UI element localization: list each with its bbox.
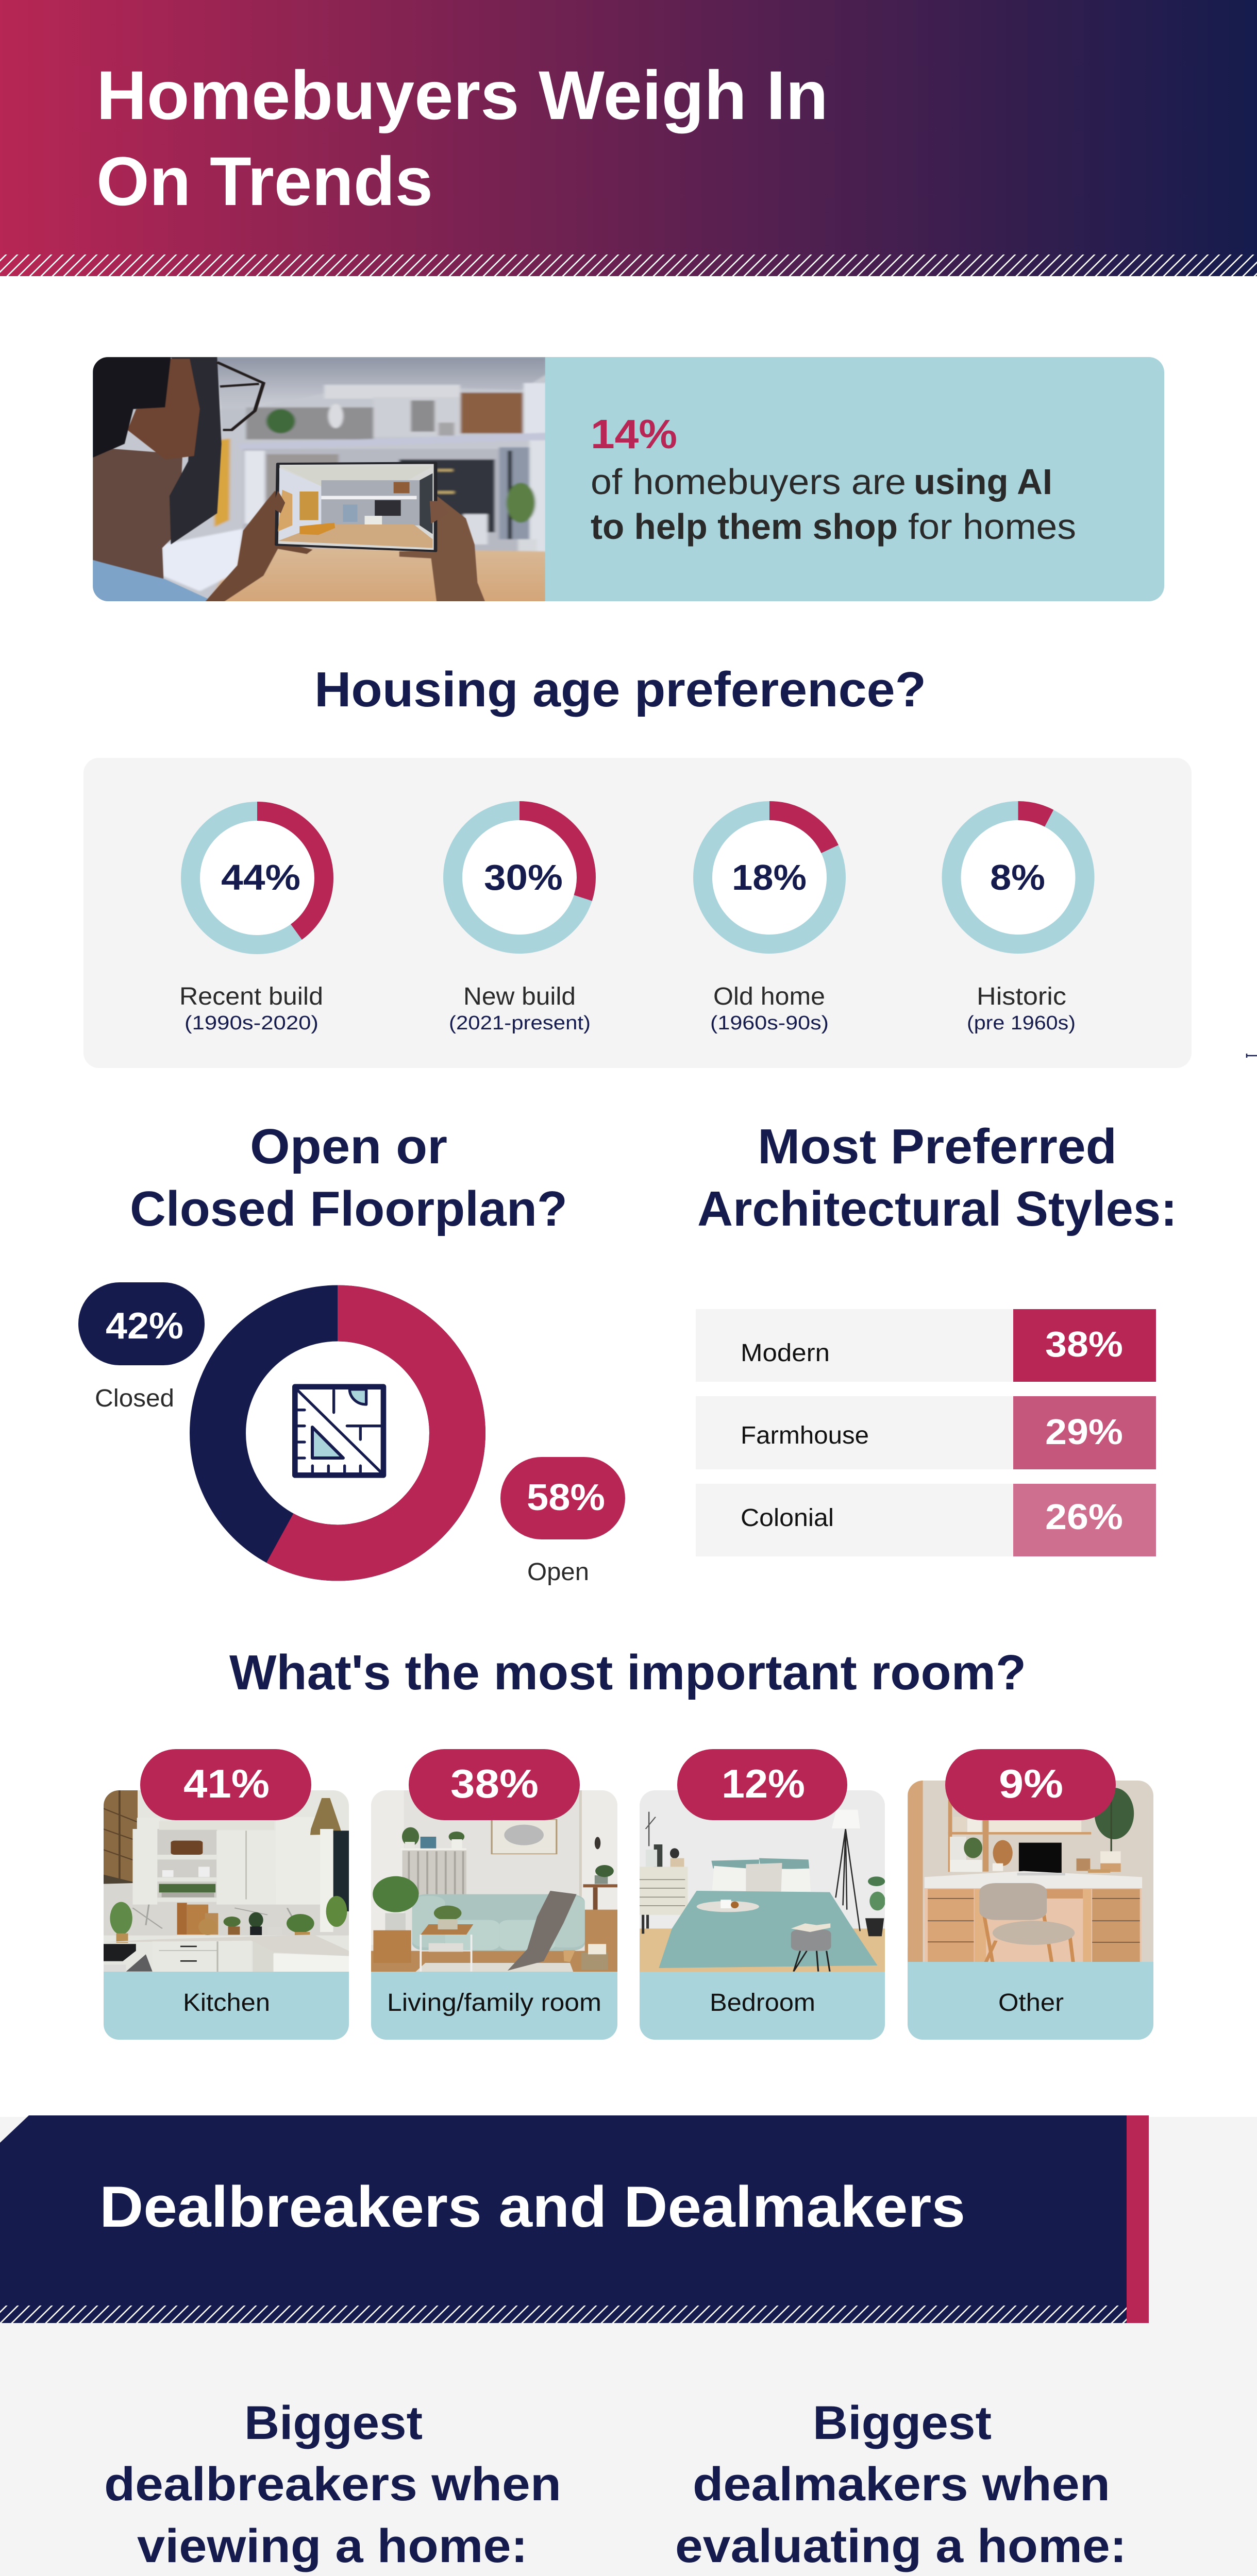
photo: kitchen [103,1790,349,1972]
room label: living room: Living/family room [387,1989,601,2016]
donut: new build [449,811,591,1034]
donut: historic [951,811,1085,1034]
row: colonial: Colonial [741,1504,834,1532]
callout: 41% [140,1749,311,1820]
photo: living room [371,1790,617,1972]
card: other [908,1749,1154,2040]
row: colonial: 26% [1045,1497,1123,1537]
icon: floorplan [295,1387,383,1475]
tablet screen [276,463,435,551]
row: farmhouse: Farmhouse [741,1422,869,1449]
callout: open 58%: Open [527,1558,589,1586]
stat text: of homebuyers are [591,462,906,502]
heading: architectural styles: Architectural Styles: [697,1181,1177,1236]
callout: 12% [677,1749,847,1820]
row: modern: Modern [741,1340,830,1367]
card: kitchen [103,1749,349,2040]
donut: recent build: Recent build [179,983,323,1010]
heading: biggest dealmakers: evaluating a home: [675,2520,1127,2572]
callout: 12%: 12% [722,1761,805,1806]
row: modern: 38% [1045,1324,1123,1364]
heading: biggest dealbreakers: viewing a home: [137,2520,528,2572]
heading: biggest dealbreakers [104,2397,561,2572]
donut: old home [703,811,836,1034]
chart: floorplan donut [78,1282,625,1586]
header banner [0,0,1257,276]
heading: architectural styles: Most Preferred [758,1119,1117,1174]
donut: historic: 8% [990,857,1045,897]
panel: dealbreakers and dealmakers background [0,2117,1257,2576]
donut: old home: Old home [713,983,825,1010]
heading: biggest dealmakers: dealmakers when [693,2458,1110,2511]
banner: dealbreakers and dealmakers: Dealbreakers and Dealmakers [99,2175,965,2239]
callout: 9% [945,1749,1116,1820]
row: farmhouse: 29% [1045,1412,1123,1452]
heading: biggest dealbreakers: Biggest [244,2397,423,2449]
donut: recent build: 44% [221,857,300,897]
callout: 38% [409,1749,580,1820]
photo: desk [908,1780,1154,1963]
photo: man with tablet [93,357,546,604]
panel: room cards [103,1749,1154,2040]
banner: dealbreakers and dealmakers [0,2115,1149,2323]
callout: 41%: 41% [183,1761,270,1806]
panel: housing age donuts [83,758,1192,1068]
callout: open 58% [500,1457,625,1586]
row: farmhouse [696,1396,1156,1469]
chart: architectural styles [696,1309,1156,1556]
row: modern [696,1309,1156,1382]
row: colonial [696,1484,1156,1556]
room label: other: Other [998,1989,1064,2016]
heading: housing age preference: Housing age preference? [314,662,926,717]
card: living room [371,1749,617,2040]
donut: recent build [179,811,324,1034]
callout: closed 42%: 42% [106,1306,183,1347]
heading: open or closed: Open or [250,1119,447,1174]
title: Homebuyers Weigh In [96,57,828,134]
stat text [591,411,1076,547]
donut: old home: (1960s-90s) [710,1012,829,1034]
stat text: using AI [914,462,1052,502]
stat text: for homes [908,506,1076,547]
panel: AI stat card [93,357,1164,604]
heading: most important room: What's the most important room? [229,1645,1026,1700]
donut: old home: 18% [732,857,807,897]
stat text: to help them shop [591,506,898,547]
callout: closed 42%: Closed [95,1385,174,1412]
donut: historic: (pre 1960s) [967,1012,1076,1034]
donut: new build: 30% [484,857,563,897]
donut: new build: (2021-present) [449,1012,591,1034]
stat text: 14% [591,411,677,457]
card: bedroom [639,1749,886,2040]
heading: open or closed [130,1119,567,1236]
room label: kitchen: Kitchen [183,1989,270,2016]
callout: open 58%: 58% [527,1477,605,1518]
donut: recent build: (1990s-2020) [185,1012,319,1034]
heading: biggest dealbreakers: dealbreakers when [104,2458,561,2511]
heading: biggest dealmakers [675,2397,1127,2572]
donut: new build: New build [463,983,576,1010]
heading: architectural styles [697,1119,1177,1236]
title [96,57,828,220]
photo: bedroom [639,1790,886,1972]
callout: closed 42% [78,1282,205,1412]
heading: open or closed: Closed Floorplan? [130,1181,567,1236]
heading: biggest dealmakers: Biggest [813,2397,992,2449]
title: On Trends [96,143,433,220]
donut: historic: Historic [977,983,1066,1010]
callout: 9%: 9% [999,1761,1063,1806]
callout: 38%: 38% [450,1761,539,1806]
room label: bedroom: Bedroom [710,1989,815,2016]
